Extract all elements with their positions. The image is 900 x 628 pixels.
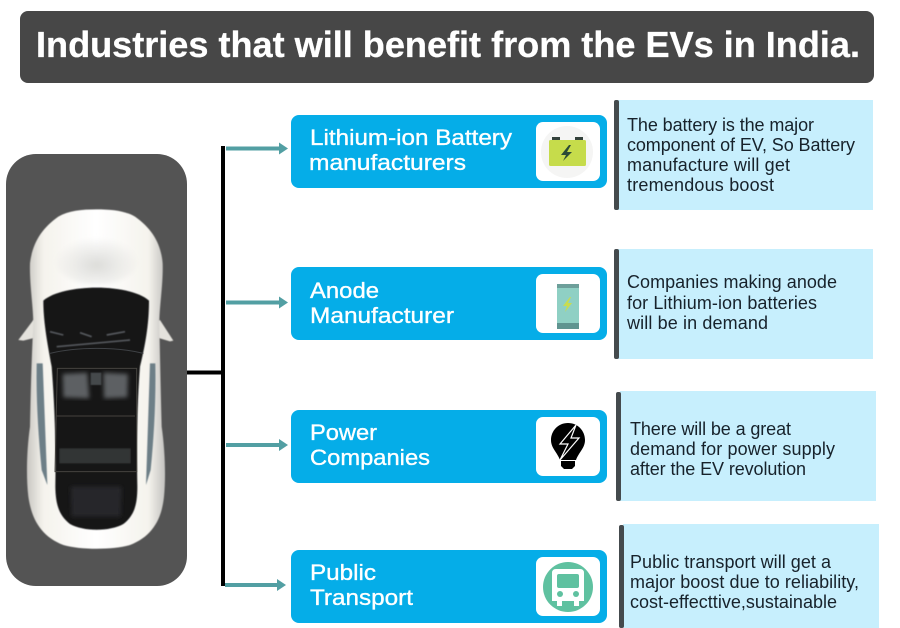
windshield reflections	[50, 348, 143, 353]
text block: power	[616, 391, 876, 501]
connector lines	[187, 146, 225, 586]
arrow 2	[226, 296, 288, 308]
arrow 3	[226, 439, 288, 451]
icon: battery cell	[557, 284, 579, 329]
text block: public transport: cost-effecttive,sustainable	[630, 592, 837, 612]
text block: power: There will be a great	[630, 419, 791, 439]
panel: power companies	[291, 410, 607, 483]
icon: car battery	[541, 126, 593, 178]
icon: light bulb with bolt	[551, 423, 585, 469]
arrow 1	[226, 142, 288, 154]
panel: power companies: Companies	[310, 445, 430, 470]
text block: anode: will be in demand	[626, 313, 768, 333]
panel: anode manufacturer: Anode	[310, 278, 379, 303]
title	[20, 11, 874, 83]
panel: public transport	[291, 550, 607, 623]
text block: anode	[614, 249, 873, 359]
panel: lithium-ion battery manufacturers: Lithium-ion Battery	[310, 125, 512, 150]
text block: anode: for Lithium-ion batteries	[627, 293, 817, 313]
text block: public transport: Public transport will get a	[630, 552, 832, 572]
panel: car	[6, 154, 187, 586]
icon: bus	[543, 562, 593, 612]
panel: lithium-ion battery manufacturers	[291, 115, 607, 188]
panel: power companies: Power	[310, 420, 377, 445]
text block: battery	[614, 100, 873, 210]
text block: battery: manufacture will get	[627, 155, 790, 175]
panel: public transport: Public	[310, 560, 376, 585]
text block: battery: tremendous boost	[627, 175, 774, 195]
panel: anode manufacturer: Manufacturer	[310, 303, 454, 328]
text block: power: demand for power supply	[630, 439, 835, 459]
text block: public transport: major boost due to reliability,	[630, 572, 859, 592]
panel: lithium-ion battery manufacturers: manufacturers	[309, 150, 466, 175]
seats	[63, 373, 128, 398]
text block: battery: The battery is the major	[627, 115, 814, 135]
text block: battery: component of EV, So Battery	[627, 135, 855, 155]
text block: anode: Companies making anode	[627, 272, 837, 292]
arrow 4	[225, 579, 286, 591]
text block: public transport	[619, 524, 879, 628]
panel: anode manufacturer	[291, 267, 607, 340]
glass roof	[43, 288, 149, 530]
side windows	[37, 363, 47, 485]
icon: car top view	[18, 209, 173, 549]
title: Industries that will benefit from the EVs in India.	[36, 24, 860, 65]
text block: power: after the EV revolution	[630, 459, 806, 479]
panel: public transport: Transport	[310, 585, 413, 610]
